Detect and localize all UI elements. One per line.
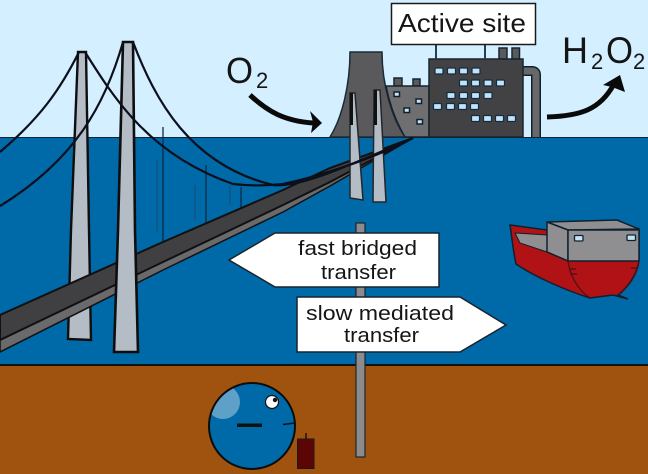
- rear small tower: [68, 52, 91, 340]
- sign: fast bridged transfer: fast bridged: [298, 238, 417, 260]
- sea: [0, 138, 648, 366]
- ship: [510, 220, 639, 299]
- sign post: [356, 223, 365, 457]
- sign: fast bridged transfer: [229, 233, 439, 287]
- mouth line: [283, 423, 295, 424]
- suspension cables: [0, 42, 413, 206]
- sky background: [0, 0, 648, 138]
- active site label: Active site: [398, 8, 526, 38]
- deck: [515, 233, 547, 252]
- battery: [298, 433, 314, 468]
- hull seams: [568, 261, 639, 298]
- sign: fast bridged transfer: transfer: [321, 262, 396, 284]
- road deck: [0, 138, 413, 352]
- cooling tower: [330, 52, 405, 137]
- H2O2 label: H: [562, 30, 588, 71]
- O2 label: O: [226, 50, 253, 91]
- hull: [510, 225, 639, 299]
- H2O2 label: 2: [591, 49, 603, 74]
- H2O2 label: 2: [633, 49, 645, 74]
- active site factory complex: [330, 4, 536, 137]
- eye: [266, 396, 278, 408]
- sign: slow mediated transfer: [297, 297, 506, 352]
- hanger cables: [157, 127, 283, 250]
- bridge: [0, 42, 413, 352]
- pipe: [523, 71, 536, 137]
- small support towers: [350, 90, 386, 202]
- H2O2 label: [562, 30, 645, 74]
- arrow: H2O2 out: [547, 75, 625, 117]
- highlight: [212, 388, 240, 419]
- middle building: [386, 78, 429, 137]
- sign: slow mediated transfer: slow mediated: [306, 303, 454, 325]
- seabed: [0, 365, 648, 474]
- sign: slow mediated transfer: transfer: [344, 325, 419, 347]
- O2 label: 2: [256, 68, 268, 93]
- active site label: [392, 4, 536, 44]
- minus sign: [237, 424, 262, 427]
- arrow: O2 in: [250, 95, 322, 133]
- sign posts: [436, 44, 485, 59]
- O2 label: [226, 50, 268, 93]
- main factory building: [429, 48, 523, 137]
- front tall tower: [114, 42, 138, 352]
- H2O2 label: O: [606, 30, 633, 71]
- electron character: [206, 383, 295, 469]
- cabin: [547, 220, 639, 261]
